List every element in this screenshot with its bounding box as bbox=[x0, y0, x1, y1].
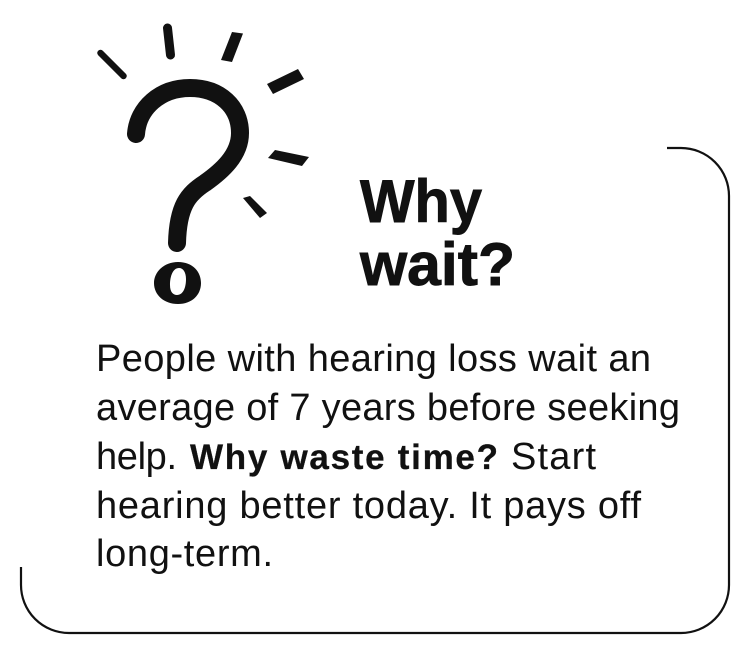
body text: long-term. bbox=[96, 533, 273, 575]
heading: wait? bbox=[359, 231, 515, 298]
icon: question mark with rays bbox=[100, 28, 309, 304]
body text: Start bbox=[511, 436, 596, 478]
heading: Why bbox=[360, 168, 483, 235]
body text: Why waste time? bbox=[190, 438, 498, 477]
body text bbox=[96, 338, 680, 575]
ray 1 bbox=[100, 53, 124, 76]
question mark hook bbox=[136, 88, 240, 243]
ray 4 bbox=[267, 69, 304, 94]
panel outline: open rounded frame bbox=[21, 148, 729, 633]
ray 6 bbox=[243, 196, 267, 218]
ray 2 bbox=[168, 28, 170, 55]
body text: hearing better today. It pays off bbox=[96, 485, 641, 527]
body text: People with hearing loss wait an bbox=[96, 338, 651, 380]
body text: help. bbox=[96, 436, 177, 478]
ray 3 bbox=[221, 32, 243, 62]
heading bbox=[359, 168, 515, 298]
ray 5 bbox=[268, 150, 309, 166]
body text: average of 7 years before seeking bbox=[96, 387, 680, 429]
question mark dot bbox=[154, 262, 201, 304]
